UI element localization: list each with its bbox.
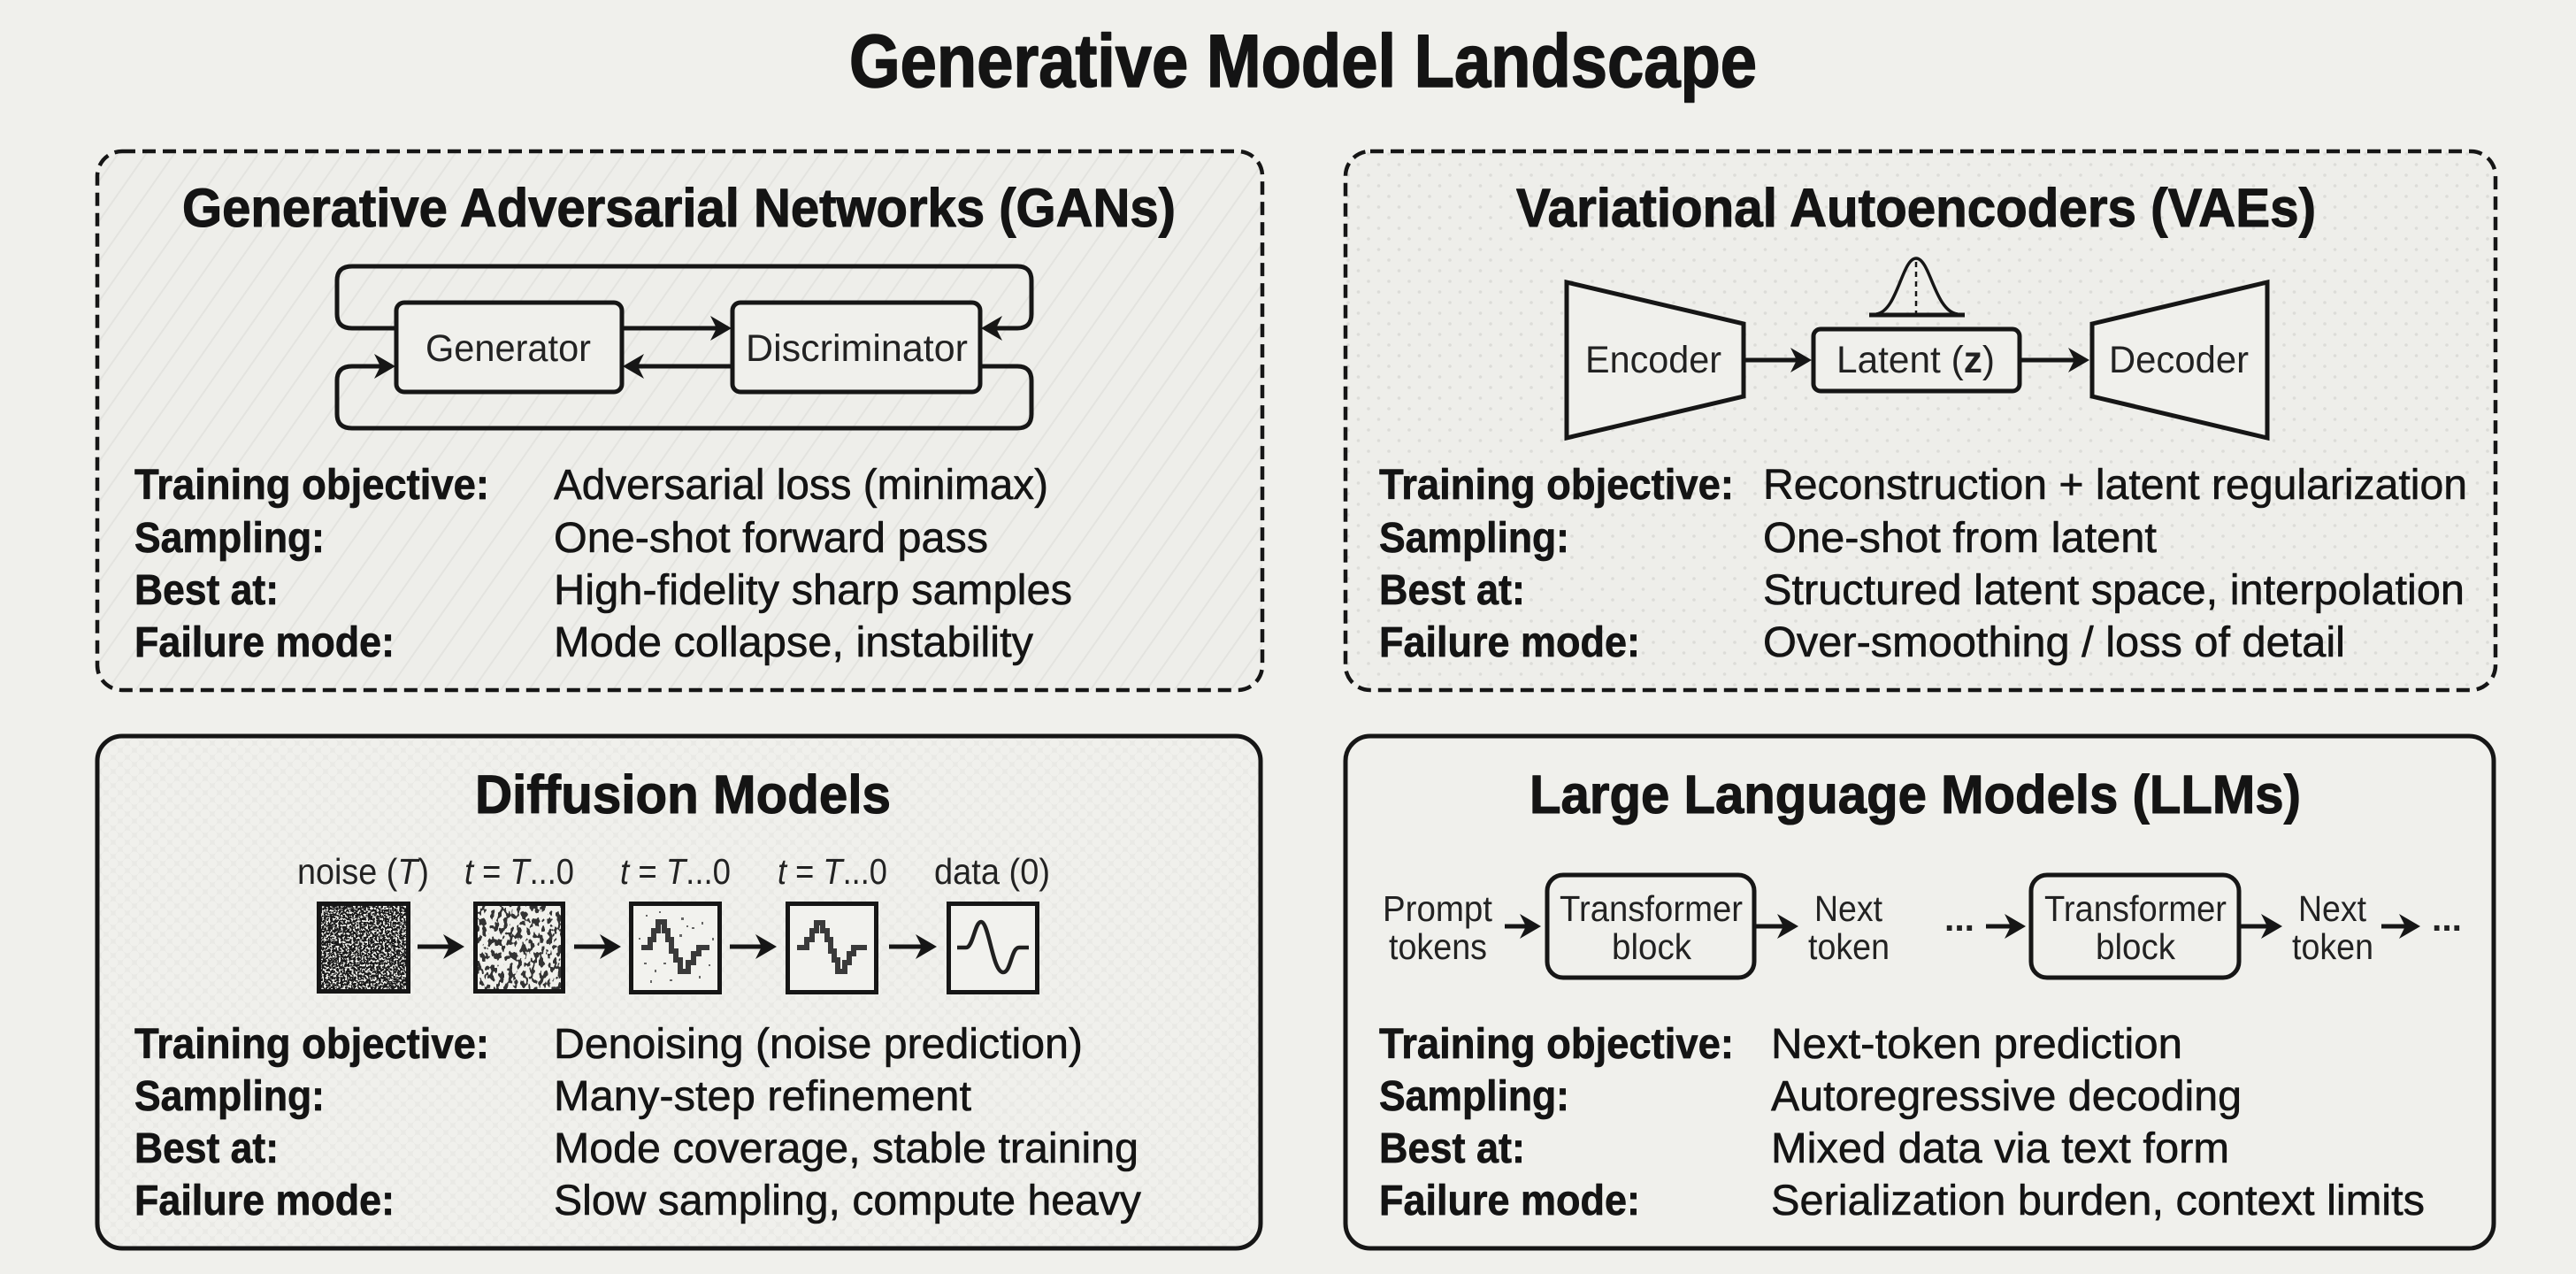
attributes: Diffusion: Slow sampling, compute heavy	[554, 1178, 1141, 1224]
attributes: LLMs: Training objective:	[1379, 1021, 1734, 1068]
box: generator	[396, 303, 622, 392]
attributes: VAEs: Over-smoothing / loss of detail	[1763, 619, 2345, 666]
arrow: ellipsis to transformer	[1986, 924, 2022, 929]
icon: gaussian curve	[1869, 258, 1965, 315]
step label: t 3: t = T...0	[778, 851, 887, 892]
arrow: generator to discriminator	[622, 326, 728, 331]
step label: t 1: t = T...0	[464, 851, 574, 892]
diagram: generator discriminator loop	[337, 266, 1031, 428]
attributes: Diffusion: Many-step refinement	[554, 1073, 971, 1120]
attributes: GANs: Best at:	[134, 567, 279, 614]
shape: encoder	[1567, 282, 1744, 438]
label: prompt tokens: tokens	[1389, 926, 1487, 967]
label: generator: Generator	[426, 327, 591, 370]
attributes: Diffusion: Failure mode:	[134, 1178, 395, 1224]
arrow: prompt to transformer	[1505, 924, 1537, 929]
attributes: LLMs: Serialization burden, context limits	[1771, 1178, 2425, 1224]
attributes: LLMs: Mixed data via text form	[1771, 1125, 2229, 1172]
image: clean data wave	[948, 904, 1037, 993]
attributes: VAEs: Structured latent space, interpolation	[1763, 567, 2465, 614]
attributes: LLMs: Autoregressive decoding	[1771, 1073, 2242, 1120]
attributes: LLMs: Best at:	[1379, 1125, 1525, 1172]
diagram: denoising steps	[297, 851, 1050, 993]
label: decoder: Decoder	[2109, 339, 2249, 381]
attributes: VAEs	[1379, 462, 2467, 666]
label: next token 1: Next	[1814, 888, 1883, 929]
image: pure noise	[318, 902, 410, 993]
heading: GANs: Generative Adversarial Networks (GANs)	[182, 178, 1176, 238]
title: Generative Model Landscape	[849, 19, 1757, 103]
attributes: GANs: One-shot forward pass	[554, 515, 988, 562]
attributes: LLMs: Next-token prediction	[1771, 1021, 2182, 1068]
label: transformer block 2: block	[2096, 926, 2175, 967]
attributes: VAEs: Reconstruction + latent regularization	[1763, 462, 2467, 509]
attributes: Diffusion: Best at:	[134, 1125, 279, 1172]
image: smooth stepped wave	[787, 904, 876, 993]
attributes: GANs: Adversarial loss (minimax)	[554, 462, 1048, 509]
arrow: encoder to latent	[1744, 357, 1808, 363]
label: encoder: Encoder	[1585, 339, 1721, 381]
attributes: GANs: Sampling:	[134, 515, 325, 562]
panel: VAEs	[1346, 151, 2496, 690]
label: next token 1: token	[1808, 926, 1890, 967]
image: heavy noise	[474, 902, 564, 993]
label: ellipsis: ...	[1944, 898, 1974, 939]
step label: noise: noise (T)	[297, 851, 429, 892]
label: transformer block 1: block	[1612, 926, 1691, 967]
label: latent: Latent (z)	[1836, 339, 1995, 381]
label: prompt tokens: Prompt	[1383, 888, 1493, 929]
arrow: next token onward	[2381, 924, 2417, 929]
attributes: LLMs	[1379, 1021, 2425, 1224]
step label: data: data (0)	[934, 851, 1050, 892]
attributes: Diffusion: Mode coverage, stable training	[554, 1125, 1138, 1172]
attributes: GANs: Mode collapse, instability	[554, 619, 1033, 666]
arrow: step 1	[418, 945, 461, 948]
attributes: Diffusion: Denoising (noise prediction)	[554, 1021, 1083, 1068]
panel: GANs	[97, 151, 1262, 690]
attributes: VAEs: Failure mode:	[1379, 619, 1640, 666]
box: latent	[1813, 329, 2020, 391]
label: next token 1	[1808, 888, 1890, 967]
panel: Diffusion Models	[97, 736, 1261, 1248]
label: next token 2: Next	[2298, 888, 2367, 929]
diagram: token pipeline	[1383, 875, 2462, 978]
arrow: step 4	[889, 945, 933, 948]
arrow: transformer 2 to next token	[2241, 924, 2279, 929]
attributes: Diffusion: Sampling:	[134, 1073, 325, 1120]
label: transformer block 1	[1560, 888, 1743, 967]
attributes: Diffusion	[134, 1021, 1141, 1224]
attributes: GANs	[134, 462, 1072, 666]
label: trailing ellipsis: ...	[2432, 898, 2462, 939]
box: transformer block 2	[2031, 875, 2239, 978]
label: transformer block 2	[2044, 888, 2227, 967]
label: next token 2: token	[2292, 926, 2373, 967]
attributes: Diffusion: Training objective:	[134, 1021, 489, 1068]
label: transformer block 2: Transformer	[2044, 888, 2227, 929]
label: discriminator: Discriminator	[746, 327, 968, 370]
attributes: GANs: Failure mode:	[134, 619, 395, 666]
attributes: VAEs: Training objective:	[1379, 462, 1734, 509]
attributes: GANs: High-fidelity sharp samples	[554, 567, 1072, 614]
attributes: VAEs: Sampling:	[1379, 515, 1569, 562]
label: prompt tokens	[1383, 888, 1493, 967]
heading: Diffusion: Diffusion Models	[475, 764, 891, 825]
heading: VAEs: Variational Autoencoders (VAEs)	[1516, 178, 2316, 238]
attributes: VAEs: Best at:	[1379, 567, 1525, 614]
image: light noise wave	[632, 904, 720, 993]
label: next token 2	[2292, 888, 2373, 967]
arrow: latent to decoder	[2020, 357, 2086, 363]
arrow: transformer to next token	[1755, 924, 1795, 929]
attributes: LLMs: Failure mode:	[1379, 1178, 1640, 1224]
arrow: step 3	[730, 945, 773, 948]
loop arrow: discriminator to generator (bottom)	[337, 366, 1031, 428]
loop arrow: generator to discriminator (top)	[337, 266, 1031, 328]
box: discriminator	[732, 303, 980, 392]
arrow: discriminator to generator	[626, 365, 732, 368]
shape: decoder	[2092, 282, 2267, 438]
arrow: step 2	[574, 945, 617, 948]
step label: t 2: t = T...0	[620, 851, 731, 892]
attributes: LLMs: Sampling:	[1379, 1073, 1569, 1120]
attributes: GANs: Training objective:	[134, 462, 489, 509]
label: transformer block 1: Transformer	[1560, 888, 1743, 929]
heading: LLMs: Large Language Models (LLMs)	[1530, 764, 2301, 825]
diagram: encoder latent decoder	[1567, 258, 2267, 438]
panel: LLMs	[1346, 736, 2494, 1248]
box: transformer block 1	[1547, 875, 1754, 978]
attributes: VAEs: One-shot from latent	[1763, 515, 2157, 562]
